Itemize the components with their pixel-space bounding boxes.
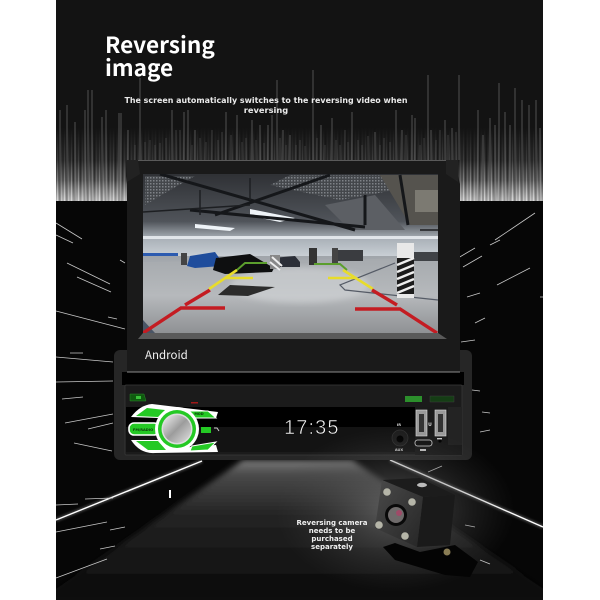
clock: 17:35 [284, 417, 340, 439]
android label: Android [145, 347, 188, 363]
control cluster [129, 404, 219, 453]
camera body [382, 478, 455, 497]
small top buttons [130, 394, 454, 404]
speed light streaks [56, 213, 543, 578]
title [105, 27, 215, 83]
subtitle: reversing [244, 105, 288, 115]
control cluster: MOD [194, 412, 204, 416]
screen frame [126, 160, 460, 372]
camera note: separately [311, 543, 353, 551]
faceplate [125, 385, 462, 455]
camera note: Reversing camera [296, 519, 368, 527]
pillars [397, 243, 414, 298]
equalizer light bars [56, 70, 543, 201]
cars [187, 252, 222, 268]
usb ports [415, 407, 462, 455]
floor [143, 258, 438, 333]
guide lines [143, 263, 437, 333]
title: Reversing [105, 27, 215, 60]
android screen panel [126, 160, 460, 372]
chassis [114, 350, 472, 460]
screen bevel [138, 333, 447, 339]
control cluster: FM/RADIO [133, 428, 153, 432]
usb ports: U [428, 422, 432, 428]
display band [126, 407, 418, 427]
head unit [114, 350, 472, 460]
bracket [383, 543, 478, 577]
camera note: purchased [311, 535, 353, 543]
camera note [296, 519, 368, 551]
aux jack: AUX [395, 448, 403, 452]
subtitle: The screen automatically switches to the reversing video when [124, 95, 408, 105]
subtitle [124, 95, 408, 115]
ceiling [143, 174, 438, 269]
title: image [105, 50, 173, 83]
reversing camera [275, 428, 515, 592]
parking camera view [143, 174, 438, 333]
camera note: needs to be [309, 527, 355, 535]
aux jack [392, 423, 408, 452]
aux jack: IR [397, 423, 401, 427]
road with glowing edges [56, 460, 543, 574]
